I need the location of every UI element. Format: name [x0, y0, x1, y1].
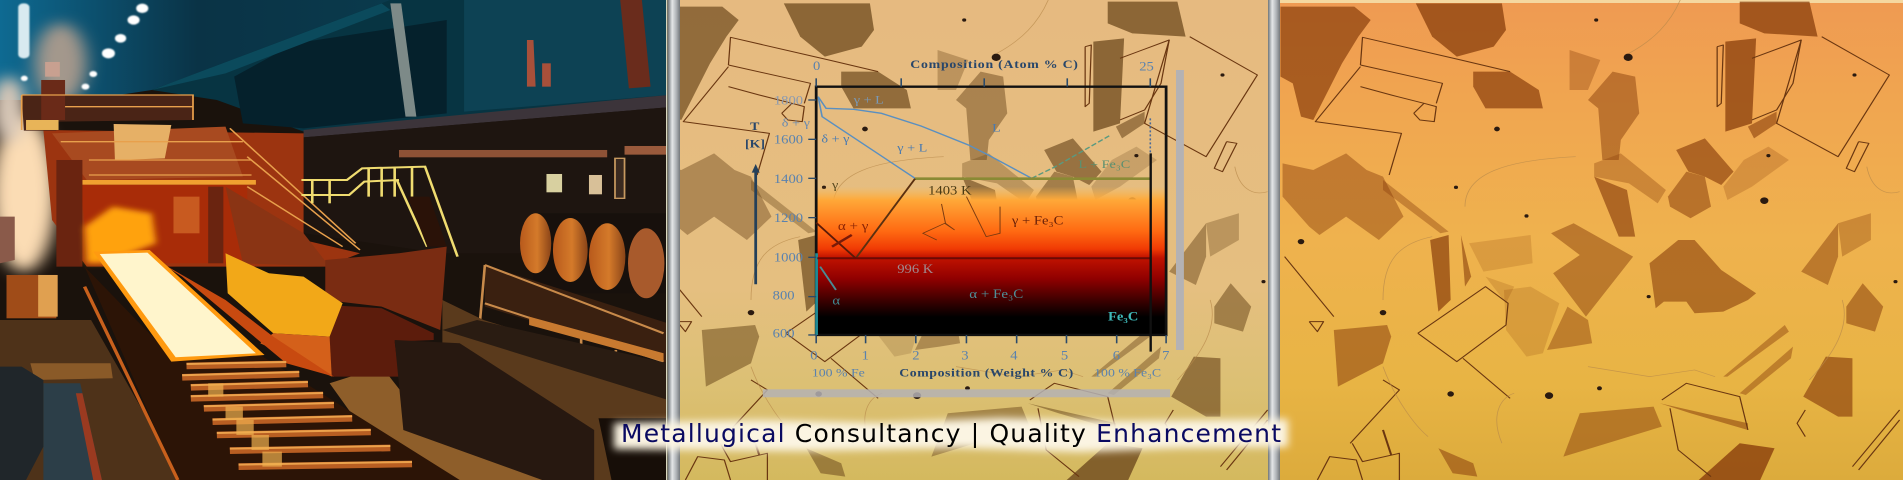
axis numbers: 4	[1010, 348, 1018, 362]
axis numbers: 1800	[774, 93, 803, 107]
axis numbers	[773, 59, 1170, 379]
tagline banner	[614, 418, 1288, 452]
flame	[85, 207, 156, 263]
axis numbers: 1	[862, 348, 869, 362]
sky and roof	[0, 0, 395, 100]
banner glow	[614, 418, 1288, 452]
sand heap	[330, 376, 542, 480]
divider: left metal bar	[666, 0, 680, 480]
roller table	[85, 267, 460, 480]
chart: iron carbon phase diagram	[745, 58, 1184, 397]
upper building wall	[152, 0, 668, 132]
axis numbers: 2	[912, 348, 920, 362]
axis titles: [K]	[745, 137, 765, 150]
axis numbers: 1400	[774, 172, 803, 186]
mill stand structure	[22, 62, 360, 267]
phase region labels: α + γ	[838, 220, 868, 234]
axis numbers: 800	[773, 288, 795, 302]
barrels and guard rail	[479, 213, 666, 362]
yellow stair railings	[301, 167, 458, 257]
axis numbers: 3	[961, 348, 969, 362]
phase boundary lines	[816, 97, 1151, 352]
axis numbers: 600	[773, 327, 795, 340]
phase region labels: 996 K	[897, 262, 934, 276]
axis titles: T	[750, 120, 760, 133]
panel: steel rolling mill photo	[0, 0, 668, 480]
phase region labels: γ	[831, 177, 838, 191]
canopy and lower right wall	[304, 95, 666, 199]
axis numbers: 5	[1061, 348, 1069, 362]
panel: diagram background micrograph	[648, 0, 1270, 480]
ceiling lights	[18, 3, 148, 90]
axis numbers: 1200	[774, 211, 803, 225]
axis numbers: 0	[813, 59, 821, 73]
axis titles: Composition (Weight % C)	[899, 367, 1073, 379]
phase region labels: α	[832, 294, 840, 307]
axis titles: Composition (Atom % C)	[910, 58, 1078, 71]
phase region labels: Fe₃C	[1108, 310, 1138, 323]
phase region labels: δ + γ	[782, 116, 810, 129]
yellow side guide plate	[156, 253, 343, 377]
axis numbers: 1000	[774, 251, 803, 264]
factory floor right	[442, 300, 668, 480]
axis numbers: 100 % Fe₃C	[1094, 367, 1161, 379]
axis numbers: 0	[810, 348, 818, 362]
axis ticks	[808, 78, 1166, 343]
phase region labels	[782, 92, 1138, 323]
axes frame	[816, 87, 1166, 335]
tagline text: Metallugical Consultancy | Quality Enhancement	[621, 419, 1281, 448]
temperature axis arrow	[752, 164, 760, 284]
left floor and machinery	[0, 217, 182, 480]
axis titles	[745, 58, 1078, 379]
axis numbers: 1600	[774, 133, 803, 146]
axis numbers: 7	[1162, 348, 1170, 362]
panel: golden steel micrograph	[1280, 0, 1903, 480]
small grain outline over chart	[923, 197, 1000, 240]
phase region labels: 1403 K	[928, 183, 972, 197]
phase region labels: γ + L	[896, 141, 927, 154]
phase region labels: α + Fe₃C	[969, 288, 1023, 302]
phase region labels: L + Fe₃C	[1078, 157, 1131, 171]
phase region labels: L	[992, 121, 1001, 134]
heat gradient fill	[817, 187, 1167, 335]
divider: right metal bar	[1268, 0, 1280, 480]
grey chart shadow	[763, 70, 1184, 397]
steam clouds	[0, 23, 87, 272]
phase region labels: δ + γ	[821, 132, 850, 145]
phase region labels: γ + Fe₃C	[1011, 213, 1063, 227]
phase region labels: γ + L	[853, 92, 884, 106]
axis numbers: 25	[1139, 60, 1154, 73]
dark red block and wedge	[325, 247, 668, 480]
axis numbers: 100 % Fe	[812, 367, 865, 379]
axis numbers: 6	[1113, 348, 1120, 362]
glowing hot steel slab	[93, 250, 265, 362]
